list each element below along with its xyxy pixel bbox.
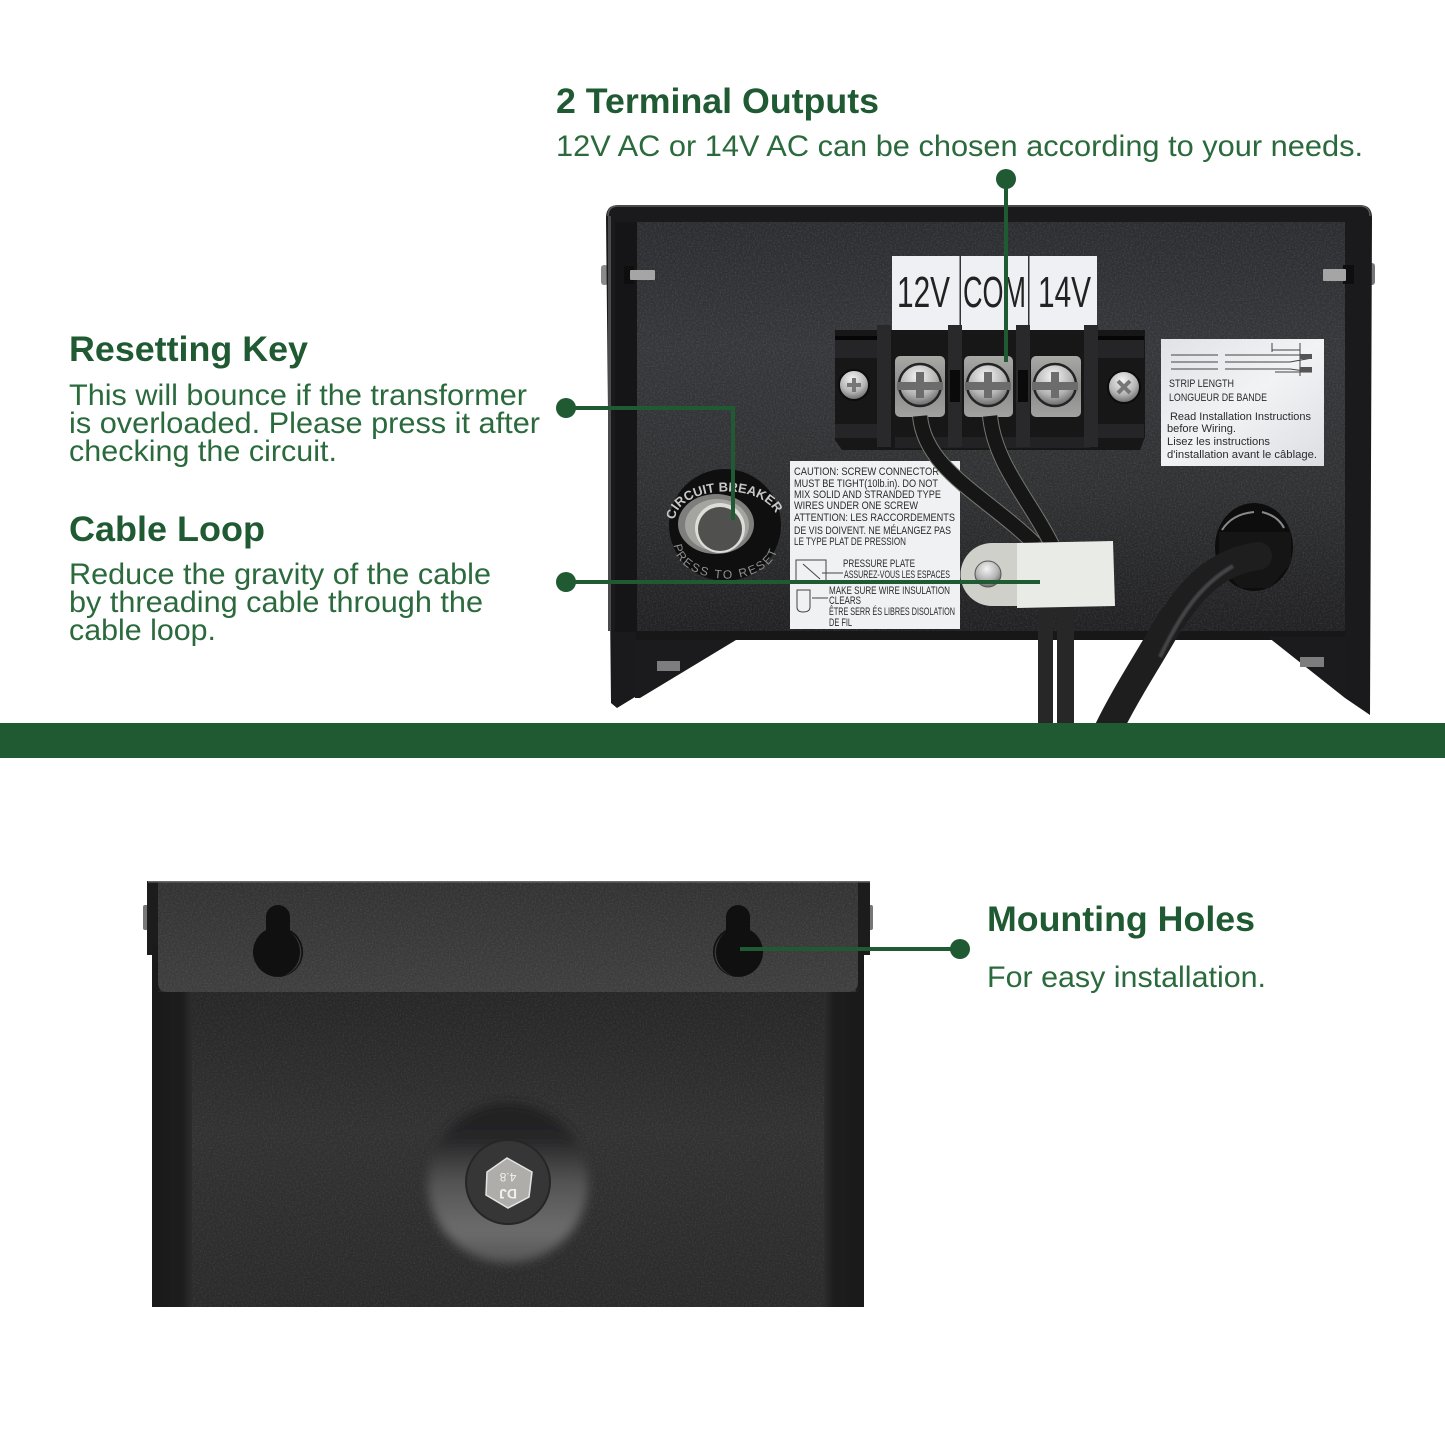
lower ridge right [1098,424,1144,438]
heading: Resetting Key [69,330,309,369]
left side rail [160,992,192,1307]
button rim [678,494,754,554]
label background [892,256,1097,330]
heading: Cable Loop [69,510,265,549]
back panel [160,990,856,1307]
strip text two: LONGUEUR DE BANDE [1169,392,1267,404]
panel: mounting plate photo [143,881,873,1307]
caution line: CAUTION: SCREW CONNECTOR [794,466,939,478]
description line three: checking the circuit. [69,435,337,468]
top rim highlight [608,206,1370,216]
plate one [895,356,945,417]
pressure plate text: PRESSURE PLATE [843,558,915,570]
bolt washer [466,1140,550,1224]
thread [1323,269,1346,281]
nut [624,266,634,284]
divider mid two [1016,325,1030,447]
right side rail [824,992,856,1307]
instructions two: before Wiring. [1167,423,1236,435]
flat wires [920,416,1074,723]
right fastener [868,905,873,930]
instructions one: Read Installation Instructions [1170,411,1311,423]
callout: cable loop [69,510,1040,647]
french text end: DE FIL [829,617,852,629]
head [1108,371,1140,403]
upper right stud [1323,265,1354,284]
description line three: cable loop. [69,614,216,647]
keyhole right [713,905,763,977]
callout: resetting key [69,330,733,520]
cable loop clamp [961,541,1115,608]
voltage labels [892,256,1097,330]
left mount screw [839,370,869,400]
head [839,370,869,400]
screw three slot [1032,372,1078,398]
lower ridge left [835,424,878,438]
right inner shadow [1345,222,1362,632]
label diagram [796,560,843,612]
label sheet [1161,339,1324,466]
clamp fold [1017,541,1115,608]
power cord [1108,556,1258,730]
instructions four: d'installation avant le câblage. [1167,449,1317,461]
button face rim [695,503,745,553]
nut [1343,265,1354,284]
clamp screw [975,561,1001,587]
leader dot [556,572,576,592]
box outer shell [606,205,1372,715]
grommet nut [1219,532,1291,588]
side strip right [858,881,870,955]
screw two [967,364,1009,406]
description: 12V AC or 14V AC can be chosen according to your needs. [556,130,1363,163]
clamp strap [961,543,1020,606]
spaces text: ASSUREZ-VOUS LES ESPACES [844,569,950,581]
divider gap one [950,370,960,402]
description line two: is overloaded. Please press it after [69,407,540,440]
leader line [1004,179,1008,362]
breaker ring [669,469,781,581]
label COM: COM [963,268,1026,317]
left fastener [143,905,149,930]
strip diagram [1171,343,1312,376]
heading: 2 Terminal Outputs [556,82,879,121]
back grain [160,990,856,1307]
right mount screw [1108,371,1140,403]
plate bottom shadow [636,631,1345,640]
label sheet [790,461,960,629]
wire one [920,416,1036,545]
caution line: MIX SOLID AND STRANDED TYPE [794,489,941,501]
wire one edge [920,416,1036,545]
left rim highlight [608,216,611,631]
upper ridge left [835,336,878,340]
description: For easy installation. [987,961,1266,994]
left edge nub [601,265,608,285]
wire down one [1038,606,1053,723]
lower left stud [657,661,680,671]
back plate [636,222,1345,640]
caution label [790,461,960,629]
ridge band left [835,340,878,358]
flange top edge [148,881,870,882]
bottom right gusset [1268,637,1345,698]
bottom left gusset [635,640,736,698]
screw one [899,364,941,406]
block body [835,330,1145,450]
ridge band right [1098,340,1144,358]
lower right stud [1300,657,1324,667]
plate three [1031,356,1081,417]
leader dot [996,169,1016,189]
recess [847,378,861,392]
label 12V: 12V [897,268,950,317]
caution line: MUST BE TIGHT(10lb.in). DO NOT [794,478,938,490]
upper left stud [624,266,655,284]
leader line [566,580,1040,584]
caution line: WIRES UNDER ONE SCREW [794,500,919,512]
description line two: by threading cable through the [69,586,483,619]
side strip left [147,881,158,955]
top flange [158,882,858,992]
description line one: This will bounce if the transformer [69,379,527,412]
divider left [877,325,891,447]
left inner shadow [615,222,637,632]
insulation text: MAKE SURE WIRE INSULATION [829,585,950,597]
keyhole left inner [282,932,301,976]
leader line [566,408,733,520]
instructions three: Lisez les instructions [1167,436,1270,448]
screw three [1034,364,1076,406]
clears text: CLEARS [829,595,861,607]
keyhole left [253,905,303,977]
heading: Mounting Holes [987,900,1255,939]
label 14V: 14V [1038,268,1091,317]
back body [152,945,864,1307]
ring text bottom: PRESS TO RESET [674,544,776,579]
wire down two [1057,606,1074,723]
thread [630,270,655,280]
caution line: DE VIS DOIVENT. NE MÉLANGEZ PAS [794,524,951,537]
leader line [740,947,960,951]
strip text one: STRIP LENGTH [1169,378,1234,390]
divider gap two [1018,370,1028,402]
bolt marking two: DJ [499,1186,517,1202]
caution line: ATTENTION: LES RACCORDEMENTS [794,512,955,524]
description line one: Reduce the gravity of the cable [69,558,491,591]
green divider band [0,723,1445,758]
cord highlight [1160,566,1233,657]
grommet highlight [1222,512,1284,530]
panel: terminal box photo [601,205,1375,723]
recess [1118,381,1130,393]
callout: terminal outputs [556,82,1363,362]
strip hatch [1300,354,1312,372]
bottom lip [895,437,1090,448]
separator one [960,256,961,330]
ring text top: CIRCUIT BREAKER [666,482,782,518]
grommet [1215,503,1293,591]
screw two slot [965,372,1011,398]
bolt head [486,1158,532,1208]
plate two [964,356,1013,417]
flange grain [158,882,858,992]
wire two [990,416,1052,545]
right edge nub [1369,263,1375,285]
button face [698,507,742,551]
circuit breaker [666,469,782,580]
callout: mounting holes [740,900,1266,994]
french text: ÊTRE SERR ÉS LIBRES DISOLATION [829,605,955,618]
leader dot [556,398,576,418]
divider right [1084,325,1098,447]
screw one slot [897,372,943,398]
upper ridge right [1098,336,1144,340]
button rim inner [685,499,749,551]
caution line: LE TYPE PLAT DE PRESSION [794,536,906,548]
dimple [428,1103,588,1263]
plate grain [636,222,1345,640]
separator two [1028,256,1030,330]
terminal block [835,325,1145,450]
right instructions label [1161,339,1324,466]
divider mid [948,325,962,447]
leader dot [950,939,970,959]
wire two edge [990,416,1052,545]
keyhole right inner [715,932,734,976]
power cord grommet [1108,503,1293,730]
bolt marking: 4.8 [499,1170,516,1184]
